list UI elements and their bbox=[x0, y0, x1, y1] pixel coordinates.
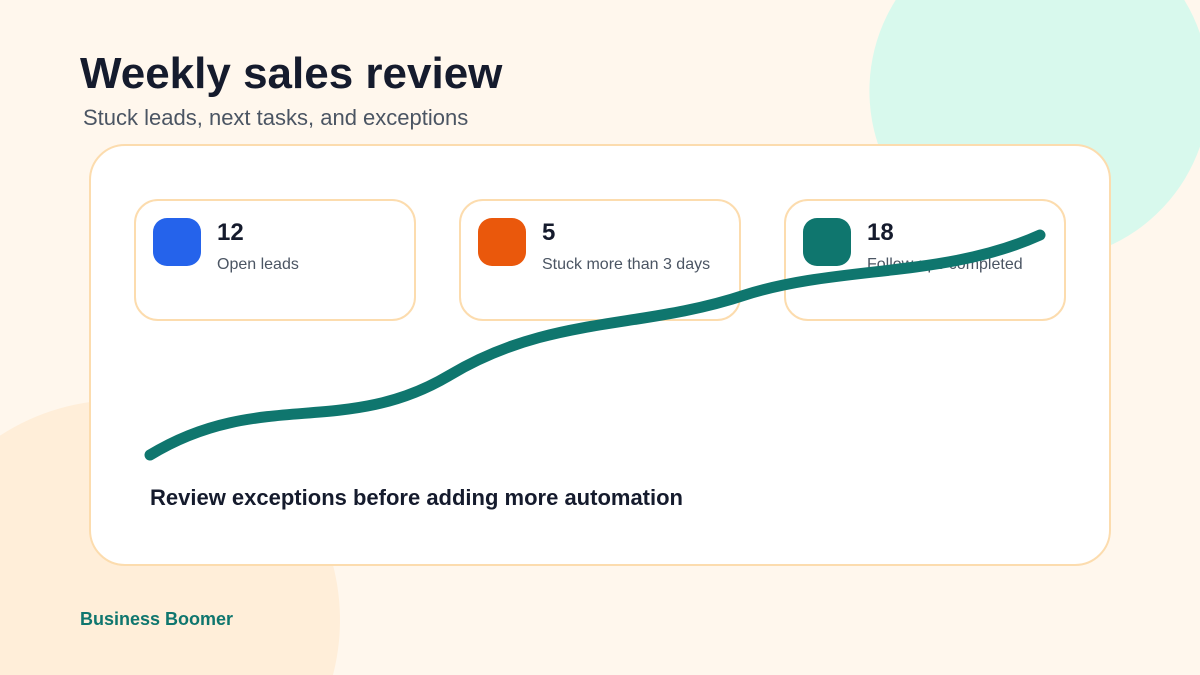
label: follow-ups completed: Follow-ups completed bbox=[867, 256, 1023, 273]
title: Weekly sales review bbox=[80, 49, 502, 98]
panel: main bbox=[89, 144, 1111, 566]
subtitle: Stuck leads, next tasks, and exceptions bbox=[83, 105, 468, 130]
label: open leads: Open leads bbox=[217, 256, 299, 273]
value: 18: 18 bbox=[867, 219, 894, 246]
icon: orange square bbox=[478, 218, 526, 266]
value: 12: 12 bbox=[217, 219, 244, 246]
callout: Review exceptions before adding more automation bbox=[150, 485, 683, 510]
stat card: open leads bbox=[134, 199, 416, 321]
stat card: stuck leads bbox=[459, 199, 741, 321]
value: 5: 5 bbox=[542, 219, 555, 246]
stat card: follow-ups bbox=[784, 199, 1066, 321]
label: stuck: Stuck more than 3 days bbox=[542, 256, 710, 273]
footer brand: Business Boomer bbox=[80, 609, 233, 629]
icon: blue square bbox=[153, 218, 201, 266]
icon: teal square bbox=[803, 218, 851, 266]
